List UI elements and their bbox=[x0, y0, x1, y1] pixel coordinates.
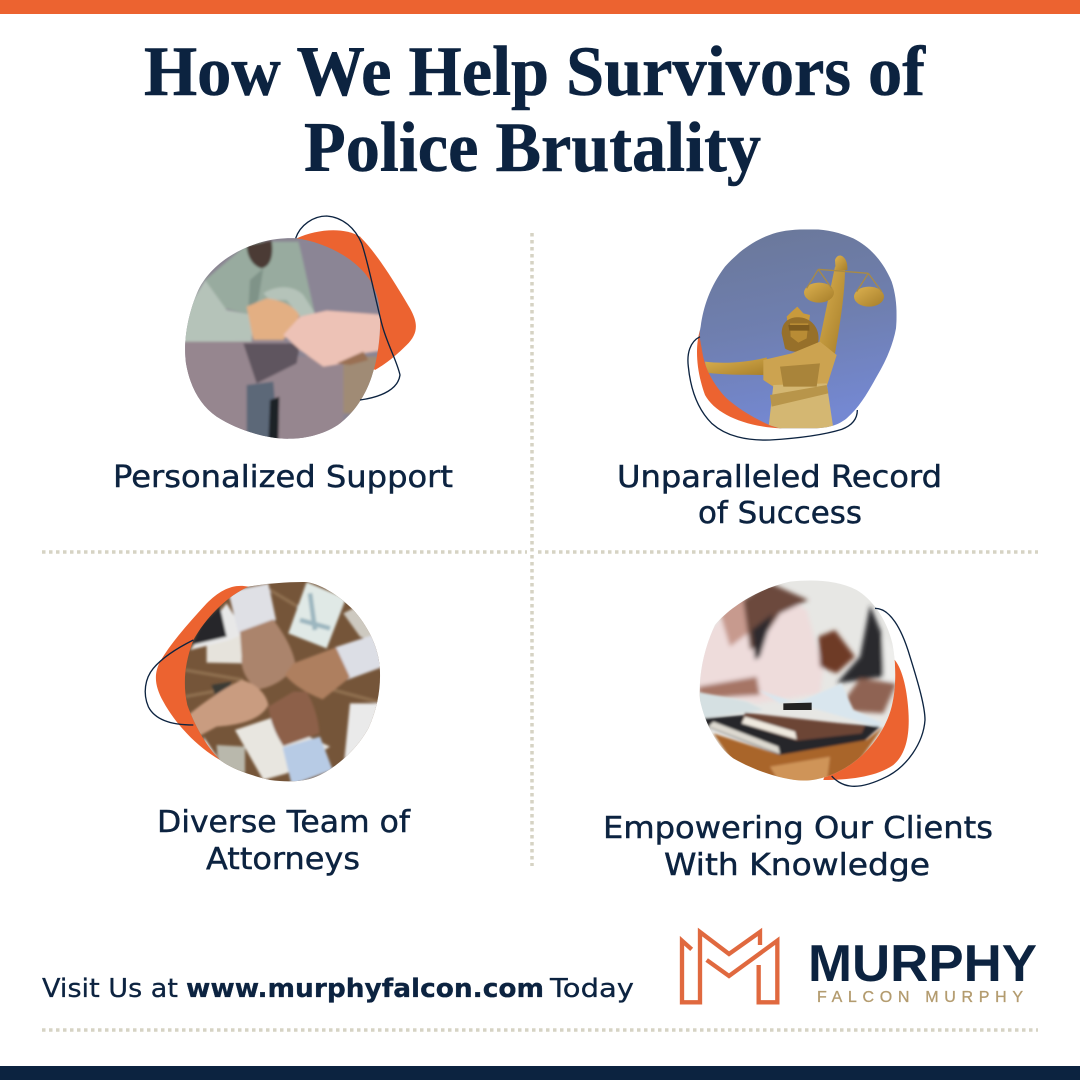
panel: empowering clients bbox=[603, 577, 993, 883]
logo bbox=[682, 932, 1037, 1006]
image: law books and discussion with orange blob bbox=[697, 577, 925, 787]
label: Empowering Our Clients bbox=[603, 811, 993, 846]
icon: M monogram bbox=[682, 932, 777, 1002]
label: Attorneys bbox=[206, 842, 360, 877]
label bbox=[157, 805, 411, 877]
horizontal dotted divider right bbox=[538, 550, 1038, 554]
panel: personalized support bbox=[113, 216, 453, 495]
call to action: www.murphyfalcon.com bbox=[186, 974, 544, 1004]
title bbox=[144, 33, 926, 187]
vertical dotted divider bbox=[530, 233, 534, 866]
image: holding hands with orange blob bbox=[180, 216, 416, 443]
panel: diverse team bbox=[145, 577, 411, 877]
label bbox=[617, 460, 942, 531]
image: four fists on desk with orange blob bbox=[145, 577, 387, 787]
title: Police Brutality bbox=[304, 109, 761, 187]
bottom bar bbox=[0, 1066, 1080, 1080]
label: of Success bbox=[698, 496, 862, 531]
label: Unparalleled Record bbox=[617, 460, 942, 495]
top accent bar bbox=[0, 0, 1080, 14]
call to action: Today bbox=[549, 974, 634, 1004]
image: lady justice statue with orange blob bbox=[688, 227, 903, 440]
call to action: Visit Us at bbox=[42, 974, 178, 1004]
wordmark: MURPHY bbox=[808, 935, 1037, 993]
label: With Knowledge bbox=[664, 848, 930, 883]
label: Personalized Support bbox=[113, 460, 453, 495]
call to action bbox=[42, 974, 634, 1004]
label: Diverse Team of bbox=[157, 805, 411, 840]
label bbox=[603, 811, 993, 883]
horizontal dotted divider left bbox=[42, 550, 527, 554]
panel: unparalleled record bbox=[617, 227, 942, 531]
title: How We Help Survivors of bbox=[144, 33, 926, 111]
bottom dotted divider bbox=[42, 1028, 1038, 1032]
logo: FALCON MURPHY bbox=[817, 989, 1023, 1006]
